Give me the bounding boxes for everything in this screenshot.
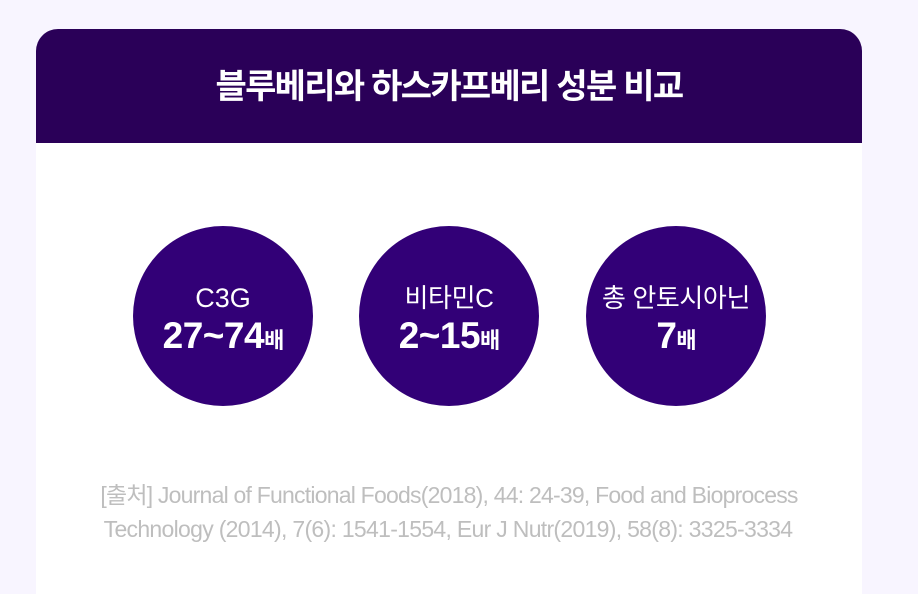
header band [36,29,862,143]
label: total anthocyanin: 총 안토시아닌 [602,283,750,313]
circle: total anthocyanin [586,226,766,406]
label: C3G: C3G [195,283,251,313]
title: 블루베리와 하스카프베리 성분 비교 [216,68,682,106]
value: 2~15배: 2~15배 [399,315,499,356]
circle: C3G [133,226,313,406]
value: 27~74배: 27~74배 [163,315,283,356]
source line 2: Technology (2014), 7(6): 1541-1554, Eur J Nutr(2019), 58(8): 3325-3334 [104,516,792,542]
label: vitamin C: 비타민C [405,283,493,313]
value: 7배: 7배 [656,315,696,356]
source line 1: [출처] Journal of Functional Foods(2018), 44: 24-39, Food and Bioprocess [100,482,798,508]
circle: vitamin C [359,226,539,406]
